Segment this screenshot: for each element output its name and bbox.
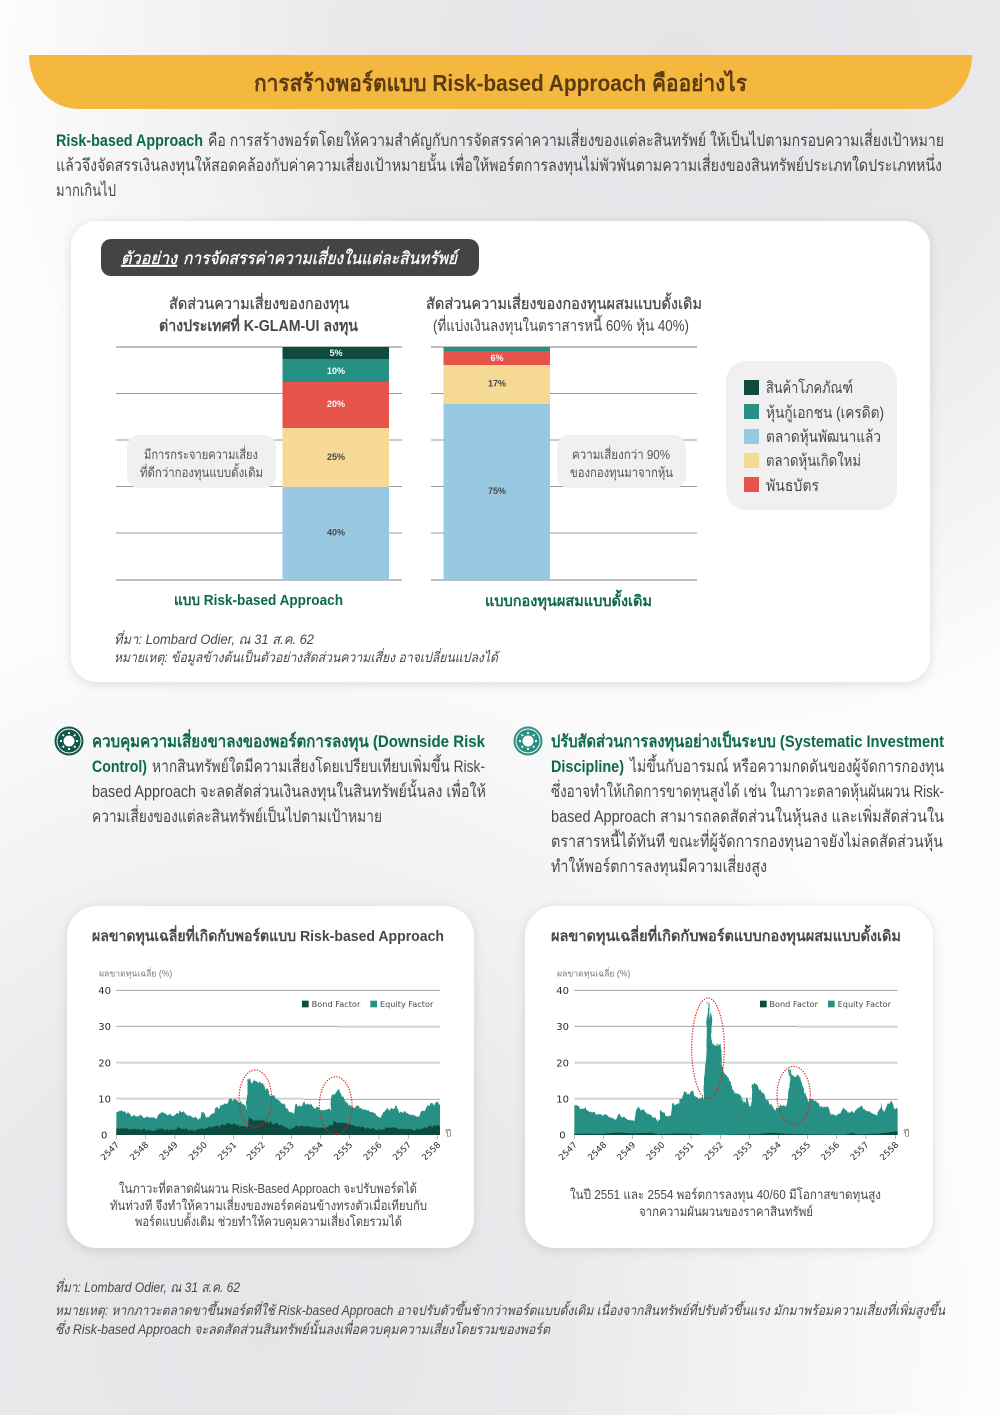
- area chart: Risk-based drawdown: 2552: [245, 1140, 268, 1163]
- area chart: traditional drawdown: ผลขาดทุนเฉลี่ย (%): [557, 967, 630, 980]
- area chart: traditional drawdown: Equity Factor: [838, 1000, 892, 1009]
- area chart: traditional drawdown: 10: [556, 1094, 569, 1105]
- area chart: Risk-based drawdown: 0: [101, 1131, 107, 1142]
- text block: downside risk control: based Approach จะลดสัดส่วนเงินลงทุนในสินทรัพย์นั้นลง เพื่อให้: [92, 779, 486, 802]
- area chart: Risk-based drawdown: ผลขาดทุนเฉลี่ย (%): [99, 967, 172, 980]
- callout: better diversification: [127, 435, 276, 488]
- source note: [114, 630, 501, 666]
- footer notes: ซึ่ง Risk-based Approach จะลดสัดส่วนสินทรัพย์นั้นลงเพื่อควบคุมความเสี่ยงโดยรวมของพอร์ต: [55, 1319, 551, 1338]
- left chart title: ต่างประเทศที่ K-GLAM-UI ลงทุน: [159, 314, 358, 336]
- area chart: traditional drawdown: 2556: [819, 1140, 842, 1163]
- footer notes: ที่มา: Lombard Odier, ณ 31 ส.ค. 62: [55, 1278, 240, 1295]
- source note: ที่มา: Lombard Odier, ณ 31 ส.ค. 62: [114, 630, 314, 647]
- area chart: traditional drawdown: 30: [556, 1022, 569, 1033]
- heading pill: ตัวอย่าง: [121, 249, 179, 268]
- stacked bar chart: Risk-based: 20%: [327, 399, 345, 409]
- area chart: traditional drawdown: 2558: [878, 1140, 901, 1163]
- heading pill: การจัดสรรค่าความเสี่ยงในแต่ละสินทรัพย์: [183, 246, 461, 268]
- title banner: การสร้างพอร์ตแบบ Risk-based Approach คืออย่างไร: [254, 69, 748, 96]
- legend: สินค้าโภคภัณฑ์: [766, 378, 853, 397]
- area chart: Risk-based drawdown: 2551: [216, 1140, 239, 1163]
- area chart: traditional drawdown: 2550: [645, 1140, 667, 1163]
- right chart title: สัดส่วนความเสี่ยงของกองทุนผสมแบบดั้งเดิม: [426, 292, 702, 314]
- area chart: traditional drawdown: 2557: [849, 1140, 871, 1163]
- panel: drawdown traditional: [525, 906, 933, 1248]
- panel caption: [110, 1180, 427, 1230]
- area chart: traditional drawdown: 2548: [586, 1140, 609, 1163]
- text block: downside risk control: หากสินทรัพย์ใดมีความเสี่ยงโดยเปรียบเทียบเพิ่มขึ้น Risk-: [152, 754, 485, 776]
- area chart: Risk-based drawdown: ปี: [444, 1128, 451, 1139]
- area chart: traditional drawdown: ปี: [903, 1128, 910, 1139]
- text block: systematic investment discipline: ปรับสัดส่วนการลงทุนอย่างเป็นระบบ (Systematic Investment: [551, 729, 944, 752]
- area chart: Risk-based drawdown: 10: [98, 1094, 111, 1105]
- stacked bar chart: Risk-based: 25%: [327, 452, 345, 462]
- panel: drawdown Risk-based: [67, 906, 474, 1248]
- panel caption: ในปี 2551 และ 2554 พอร์ตการลงทุน 40/60 มีโอกาสขาดทุนสูง: [570, 1187, 881, 1203]
- panel caption: จากความผันผวนของราคาสินทรัพย์: [639, 1204, 813, 1219]
- area chart: Risk-based drawdown: 2555: [332, 1140, 355, 1163]
- area chart: Risk-based drawdown: 2554: [303, 1140, 326, 1163]
- area chart: traditional drawdown: 0: [559, 1131, 566, 1142]
- area chart: Risk-based drawdown: 20: [98, 1058, 111, 1069]
- area chart: traditional drawdown: [556, 967, 910, 1163]
- callout: better diversification: มีการกระจายความเสี่ยง: [144, 446, 258, 462]
- text block: downside risk control: [92, 729, 486, 826]
- text block: downside risk control: ควบคุมความเสี่ยงขาลงของพอร์ตการลงทุน (Downside Risk: [92, 729, 485, 752]
- area chart: Risk-based drawdown: 2553: [274, 1140, 297, 1163]
- stacked bar chart: Risk-based: 40%: [327, 528, 345, 538]
- area chart: traditional drawdown: 2551: [674, 1140, 696, 1163]
- legend: พันธบัตร: [766, 478, 819, 495]
- panel: risk allocation example: [71, 221, 930, 682]
- title banner: [29, 55, 972, 109]
- area chart: traditional drawdown: 2554: [761, 1140, 784, 1163]
- area chart: Risk-based drawdown: 2550: [187, 1140, 210, 1163]
- text block: downside risk control: Control): [92, 757, 147, 776]
- panel heading: ผลขาดทุนเฉลี่ยที่เกิดกับพอร์ตแบบ Risk-based Approach: [92, 925, 444, 946]
- text block: systematic investment discipline: based Approach สามารถลดสัดส่วนในหุ้นลง และเพิ่มสัดส่วนใน: [551, 804, 944, 827]
- area chart: Risk-based drawdown: 40: [98, 986, 111, 997]
- callout: 90 percent risk from equities: [557, 435, 686, 488]
- area chart: traditional drawdown: Bond Factor: [769, 1000, 819, 1009]
- area chart: Risk-based drawdown: 2556: [362, 1140, 384, 1163]
- area chart: traditional drawdown: 2547: [557, 1140, 580, 1163]
- left chart title: [159, 293, 358, 336]
- legend: ตลาดหุ้นพัฒนาแล้ว: [766, 428, 881, 447]
- legend: [726, 361, 897, 510]
- bar caption: traditional: แบบกองทุนผสมแบบดั้งเดิม: [485, 589, 652, 611]
- panel caption: ทันท่วงที จึงทำให้ความเสี่ยงของพอร์ตค่อนข้างทรงตัวเมื่อเทียบกับ: [110, 1197, 427, 1213]
- area chart: Risk-based drawdown: 2557: [391, 1140, 414, 1163]
- text block: systematic investment discipline: Discipline): [551, 757, 624, 776]
- text block: downside risk control: ความเสี่ยงของแต่ละสินทรัพย์เป็นไปตามเป้าหมาย: [92, 804, 382, 826]
- legend: ตลาดหุ้นเกิดใหม่: [766, 451, 861, 471]
- text block: systematic investment discipline: [551, 729, 944, 877]
- panel heading: ผลขาดทุนเฉลี่ยที่เกิดกับพอร์ตแบบกองทุนผสมแบบดั้งเดิม: [551, 924, 901, 946]
- stacked bar chart: traditional balanced fund: 17%: [488, 378, 506, 388]
- right chart title: (ที่แบ่งเงินลงทุนในตราสารหนี้ 60% หุ้น 40%): [433, 314, 689, 336]
- area chart: traditional drawdown: 20: [556, 1058, 569, 1069]
- callout: better diversification: ที่ดีกว่ากองทุนแบบดั้งเดิม: [140, 463, 263, 481]
- text block: systematic investment discipline: ทำให้พอร์ตการลงทุนมีความเสี่ยงสูง: [551, 854, 767, 877]
- area chart: traditional drawdown: 2553: [732, 1140, 755, 1163]
- panel caption: ในภาวะที่ตลาดผันผวน Risk-Based Approach จะปรับพอร์ตได้: [119, 1180, 417, 1196]
- callout: 90 percent risk from equities: ความเสี่ยงกว่า 90%: [572, 446, 670, 462]
- stacked bar chart: Risk-based: [116, 347, 402, 580]
- stacked bar chart: Risk-based: 10%: [327, 366, 345, 376]
- bar caption: Risk-based: แบบ Risk-based Approach: [174, 592, 343, 609]
- area chart: traditional drawdown: 2555: [790, 1140, 813, 1163]
- stacked bar chart: traditional balanced fund: 75%: [488, 486, 506, 496]
- area chart: traditional drawdown: 2552: [703, 1140, 726, 1163]
- panel caption: [570, 1187, 881, 1219]
- callout: 90 percent risk from equities: ของกองทุนมาจากหุ้น: [570, 465, 673, 481]
- area chart: traditional drawdown: 2549: [615, 1140, 638, 1163]
- area chart: Risk-based drawdown: 30: [98, 1022, 111, 1033]
- heading pill: [101, 239, 479, 276]
- stacked bar chart: Risk-based: 5%: [329, 348, 343, 358]
- area chart: Risk-based drawdown: 2549: [158, 1140, 180, 1163]
- area chart: Risk-based drawdown: Bond Factor: [312, 1000, 361, 1009]
- intro paragraph: Risk-based Approach: [56, 131, 203, 150]
- area chart: traditional drawdown: 40: [556, 986, 569, 997]
- source note: หมายเหตุ: ข้อมูลข้างต้นเป็นตัวอย่างสัดส่วนความเสี่ยง อาจเปลี่ยนแปลงได้: [114, 648, 501, 666]
- stacked bar chart: traditional balanced fund: [431, 347, 697, 580]
- footer notes: [55, 1278, 946, 1338]
- area chart: Risk-based drawdown: 2547: [99, 1140, 122, 1163]
- intro paragraph: มากเกินไป: [56, 180, 116, 200]
- right chart title: [426, 292, 702, 336]
- area chart: Risk-based drawdown: [98, 967, 451, 1163]
- icon: systematic discipline: [514, 726, 542, 756]
- panel caption: พอร์ตแบบดั้งเดิม ช่วยทำให้ควบคุมความเสี่ยงโดยรวมได้: [135, 1212, 402, 1230]
- left chart title: สัดส่วนความเสี่ยงของกองทุน: [169, 293, 349, 314]
- area chart: Risk-based drawdown: 2548: [128, 1140, 151, 1163]
- intro paragraph: [56, 128, 944, 200]
- stacked bar chart: traditional balanced fund: 6%: [490, 353, 504, 363]
- legend: หุ้นกู้เอกชน (เครดิต): [766, 404, 884, 423]
- area chart: Risk-based drawdown: Equity Factor: [380, 1000, 434, 1009]
- area chart: Risk-based drawdown: 2558: [420, 1140, 443, 1163]
- icon: downside control: [54, 726, 84, 756]
